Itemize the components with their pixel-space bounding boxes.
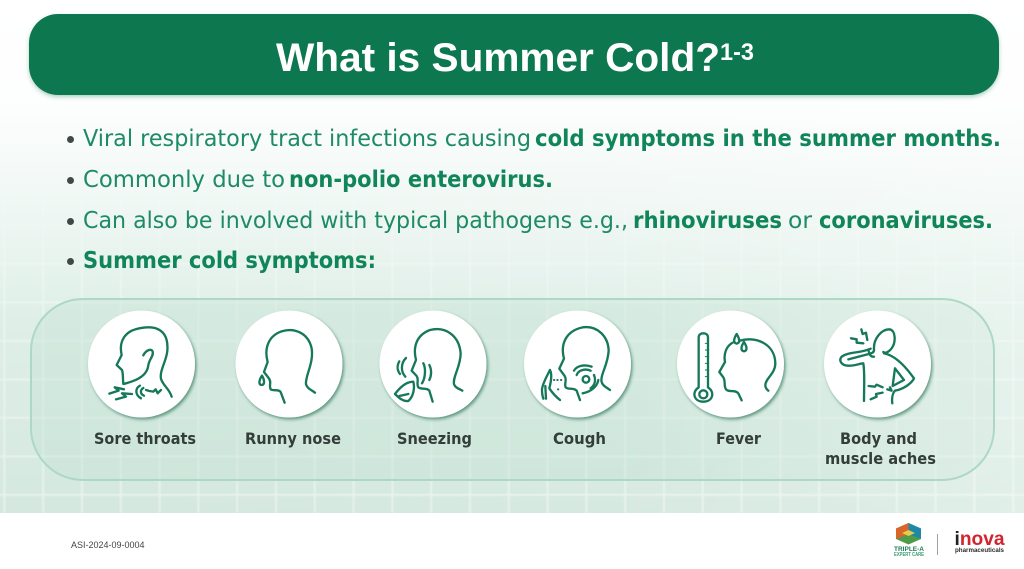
label: Fever [716,429,761,448]
bullet 3: or [788,206,812,234]
logo: Triple-A Expert Care: EXPERT CARE [894,552,925,558]
symptom: fever [677,310,784,448]
label: muscle aches [825,449,936,468]
title: What is Summer Cold? [276,36,720,80]
footer code: ASI-2024-09-0004 [71,540,145,550]
bullet list [67,124,1001,274]
title banner [29,14,999,95]
logo: Inova Pharmaceuticals: inova [954,529,1005,550]
bullet 4: Summer cold symptoms: [83,246,376,274]
label [825,429,936,468]
bullet 1: Viral respiratory tract infections causing [83,124,531,152]
label: Sneezing [397,429,472,448]
title superscript: 1-3 [720,39,754,66]
logo divider [937,534,938,555]
symptom: body and muscle aches [824,310,936,468]
label: Cough [553,429,606,448]
icon: sore throat [109,327,172,399]
bullet 2 [67,165,553,193]
panel: symptoms [31,299,994,480]
icon: fever [694,333,775,402]
icon: cough [542,327,610,400]
symptom: runny nose [236,310,342,448]
label: Runny nose [245,429,341,448]
logo: Triple-A Expert Care [894,523,925,558]
bullet 3: coronaviruses. [819,206,993,234]
symptom: sneezing [380,310,486,448]
icon: sneezing [395,329,462,402]
icon: body aches [840,329,914,403]
bullet 1 [67,124,1001,152]
background panel [0,149,1024,513]
label: Sore throats [94,429,196,448]
symptom: sore throats [88,310,196,448]
bullet 3 [67,206,993,234]
icon: runny nose [259,330,315,403]
bullet 2: Commonly due to [83,165,285,193]
logo: Triple-A Expert Care: TRIPLE-A [894,546,924,553]
bullet 3: Can also be involved with typical pathogens e.g., [83,206,628,234]
label: Body and [840,429,917,448]
logo: Inova Pharmaceuticals: pharmaceuticals [955,547,1004,554]
bullet 3: rhinoviruses [633,206,782,234]
symptom: cough [524,310,631,448]
bullet 2: non-polio enterovirus. [289,165,553,193]
